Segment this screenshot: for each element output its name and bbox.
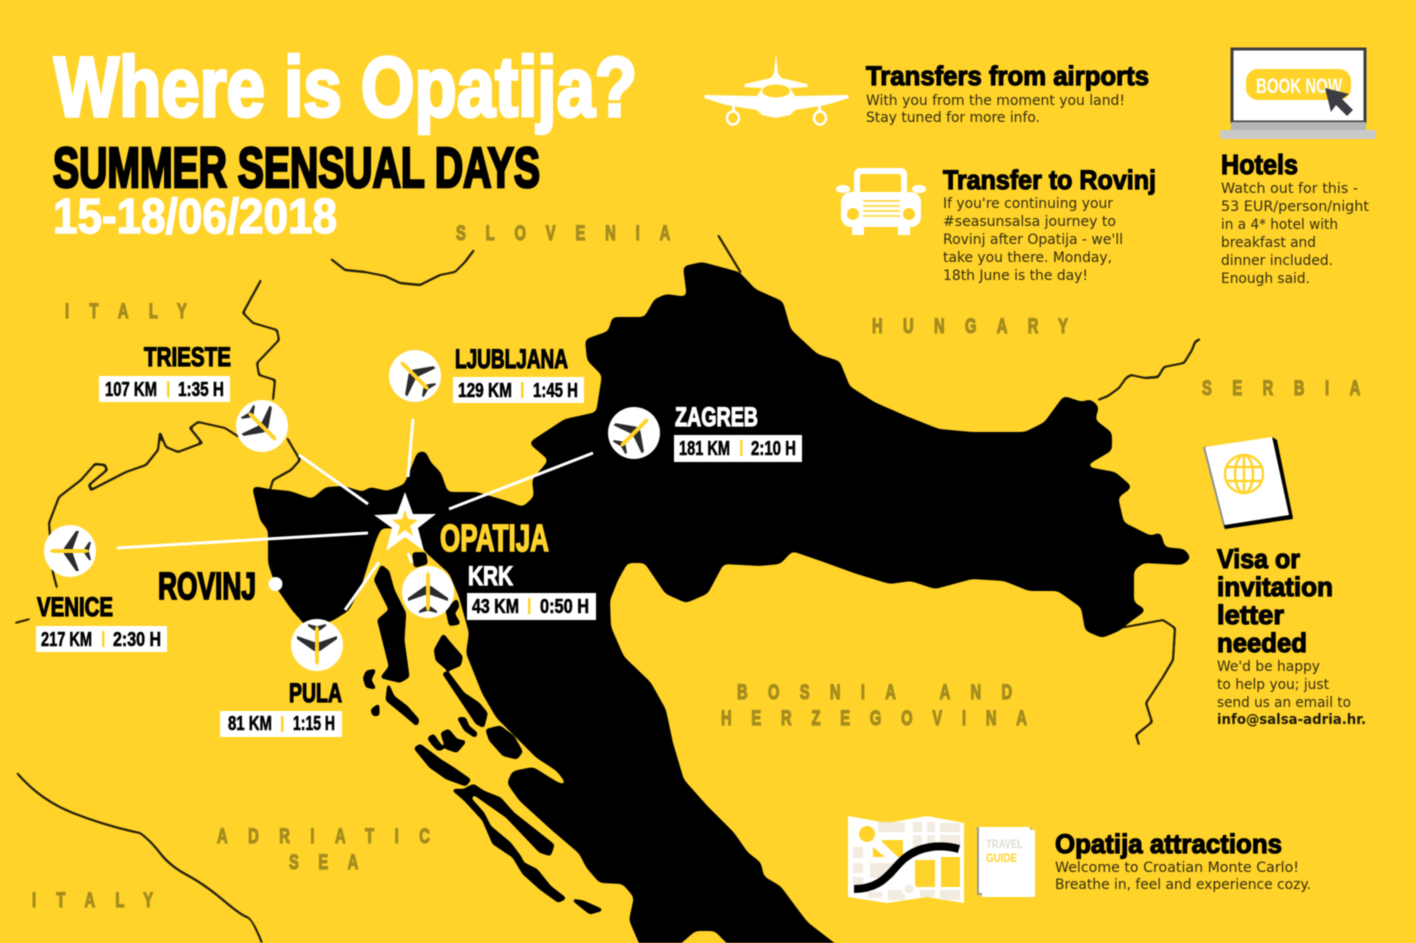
airport: Krk — [402, 561, 596, 620]
block: attractions: Breathe in, feel and experience cozy. — [1055, 877, 1311, 893]
block: transfers from airports — [866, 61, 1149, 126]
airport: Pula: PULA — [289, 678, 342, 708]
airport: Venice: 2:30 H — [113, 629, 161, 651]
airport: Ljubljana: LJUBLJANA — [455, 344, 568, 374]
subtitle: dates: 15-18/06/2018 — [53, 190, 337, 244]
map: Croatia mainland — [253, 263, 1190, 943]
subtitle: event name: SUMMER SENSUAL DAYS — [53, 136, 540, 200]
block: transfer to Rovinj: If you're continuing your — [943, 196, 1113, 212]
airport: Pula: 1:15 H — [293, 713, 335, 735]
block: hotels: dinner included. — [1221, 253, 1333, 269]
title: Where is Opatija? — [54, 40, 637, 134]
block: visa: info@salsa-adria.hr. — [1217, 712, 1366, 728]
icon: car — [836, 168, 926, 235]
label: Opatija: OPATIJA — [440, 518, 549, 560]
airport: Ljubljana: 129 KM — [458, 380, 512, 402]
block: visa: needed — [1217, 628, 1307, 658]
country labels: SEA — [289, 850, 358, 874]
block: hotels: breakfast and — [1221, 235, 1316, 251]
block: visa: invitation — [1217, 572, 1333, 602]
country labels: SLOVENIA — [456, 221, 670, 245]
route lines to Opatija — [117, 419, 593, 610]
block: visa: to help you; just — [1217, 677, 1330, 693]
block: hotels: in a 4* hotel with — [1221, 217, 1338, 233]
block: transfer to Rovinj: 18th June is the day! — [943, 268, 1088, 284]
marker: Rovinj: ROVINJ — [158, 566, 256, 608]
icon: travel guide book — [977, 827, 1035, 897]
country labels: ITALY — [32, 888, 153, 912]
airport: Venice: VENICE — [37, 592, 113, 622]
block: attractions: Opatija attractions — [1055, 829, 1282, 859]
block: hotels: Watch out for this - — [1221, 181, 1358, 197]
block: transfer to Rovinj: #seasunsalsa journey to — [943, 214, 1116, 230]
airport: Trieste: 107 KM — [105, 379, 157, 401]
airport: Zagreb — [605, 402, 802, 462]
country labels: SERBIA — [1202, 376, 1360, 400]
airport: Trieste: 1:35 H — [178, 379, 224, 401]
country labels: BOSNIA AND — [737, 680, 1012, 704]
airport: Trieste: TRIESTE — [144, 342, 231, 372]
map: border lines — [15, 235, 1200, 943]
block: attractions: Welcome to Croatian Monte Carlo! — [1055, 860, 1299, 876]
block: transfer to Rovinj: take you there. Monday, — [943, 250, 1112, 266]
icon: travel guide book: TRAVEL — [986, 837, 1023, 851]
country labels: ADRIATIC — [217, 824, 430, 848]
country labels: HUNGARY — [872, 314, 1068, 338]
block: hotels: 53 EUR/person/night — [1221, 199, 1370, 215]
block: transfers from airports: Stay tuned for more info. — [866, 110, 1040, 126]
block: transfer to Rovinj — [943, 165, 1156, 284]
airport: Pula: 81 KM — [228, 713, 272, 735]
block: visa: letter — [1217, 600, 1284, 630]
airport: Trieste — [99, 342, 290, 454]
airport: Ljubljana — [387, 344, 584, 405]
airport: Krk: KRK — [468, 561, 513, 591]
icon: laptop book now: BOOK NOW — [1256, 75, 1342, 98]
block: hotels: Hotels — [1221, 149, 1298, 180]
airport: Venice: 217 KM — [41, 629, 92, 651]
airport: Zagreb: ZAGREB — [675, 402, 758, 432]
block: visa: send us an email to — [1217, 695, 1351, 711]
country labels: ITALY — [65, 299, 187, 323]
icon: laptop book now — [1220, 49, 1376, 139]
block: hotels: Enough said. — [1221, 271, 1310, 287]
airport: Krk: 43 KM — [472, 596, 519, 618]
block: visa: We'd be happy — [1217, 659, 1320, 675]
block: hotels — [1221, 149, 1370, 287]
icon: folded map — [848, 816, 964, 903]
airport: Venice — [36, 525, 167, 652]
map: Adriatic islands — [364, 553, 602, 913]
block: transfers from airports: With you from the moment you land! — [866, 93, 1125, 109]
icon: travel guide book: GUIDE — [986, 851, 1017, 865]
airport: Ljubljana: 1:45 H — [533, 380, 578, 402]
block: visa — [1217, 544, 1366, 728]
icon: passport — [1203, 437, 1293, 529]
icon: airplane — [704, 53, 849, 124]
block: transfer to Rovinj: Rovinj after Opatija - we'll — [943, 232, 1123, 248]
country labels — [32, 221, 1360, 912]
block: transfer to Rovinj: Transfer to Rovinj — [943, 165, 1156, 195]
country labels: HERZEGOVINA — [721, 706, 1027, 730]
block: attractions — [1055, 829, 1311, 893]
airport: Zagreb: 2:10 H — [751, 438, 796, 460]
block: transfers from airports: Transfers from airports — [866, 61, 1149, 91]
airport: Pula — [220, 619, 343, 737]
airport: Krk: 0:50 H — [540, 596, 589, 618]
block: visa: Visa or — [1217, 544, 1300, 574]
airport: Zagreb: 181 KM — [679, 438, 730, 460]
icon: Opatija star — [374, 492, 436, 551]
